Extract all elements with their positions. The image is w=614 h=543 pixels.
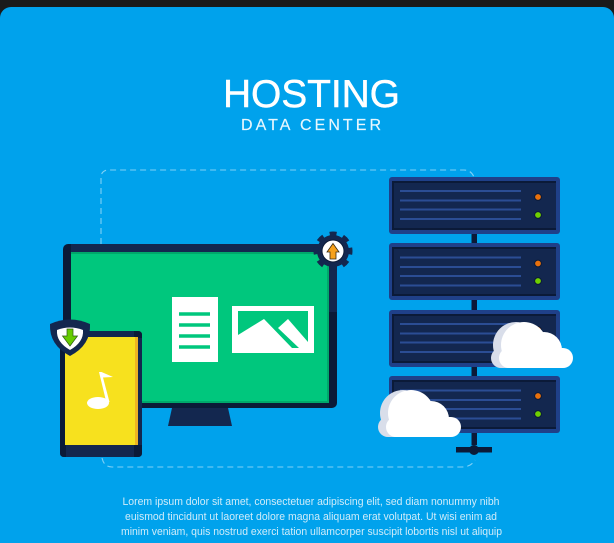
server unit 2 [389,243,560,300]
monitor screen [71,252,329,403]
body text: minim veniam, quis nostrud exerci tation ullamcorper suscipit lobortis nisl ut aliquip [121,526,502,538]
monitor [63,244,337,426]
rack connectors and base [456,230,492,455]
tablet [60,331,142,457]
server unit 3 [389,310,560,367]
body text [121,496,502,538]
icon: landscape image [232,306,314,353]
icon: download shield [50,320,90,356]
monitor frame [63,244,337,408]
server unit 1 [389,177,560,234]
tablet dark edges [60,331,142,457]
icon: cloud left [378,390,461,437]
dashed connection outline [101,170,475,467]
title: HOSTING [223,73,400,116]
icon: music note [87,372,113,409]
subtitle: DATA CENTER [241,117,381,134]
tablet screen [65,337,138,445]
icon: cloud right [491,322,573,368]
server rack [389,177,560,455]
monitor stand [168,408,232,426]
icon: upload gear [316,234,350,268]
tablet body [60,331,142,457]
icon: document [172,297,218,362]
server unit 4 [389,376,560,433]
body text: Lorem ipsum dolor sit amet, consectetuer adipiscing elit, sed diam nonummy nibh [122,496,500,508]
body text: euismod tincidunt ut laoreet dolore magna aliquam erat volutpat. Ut wisi enim ad [125,511,497,523]
